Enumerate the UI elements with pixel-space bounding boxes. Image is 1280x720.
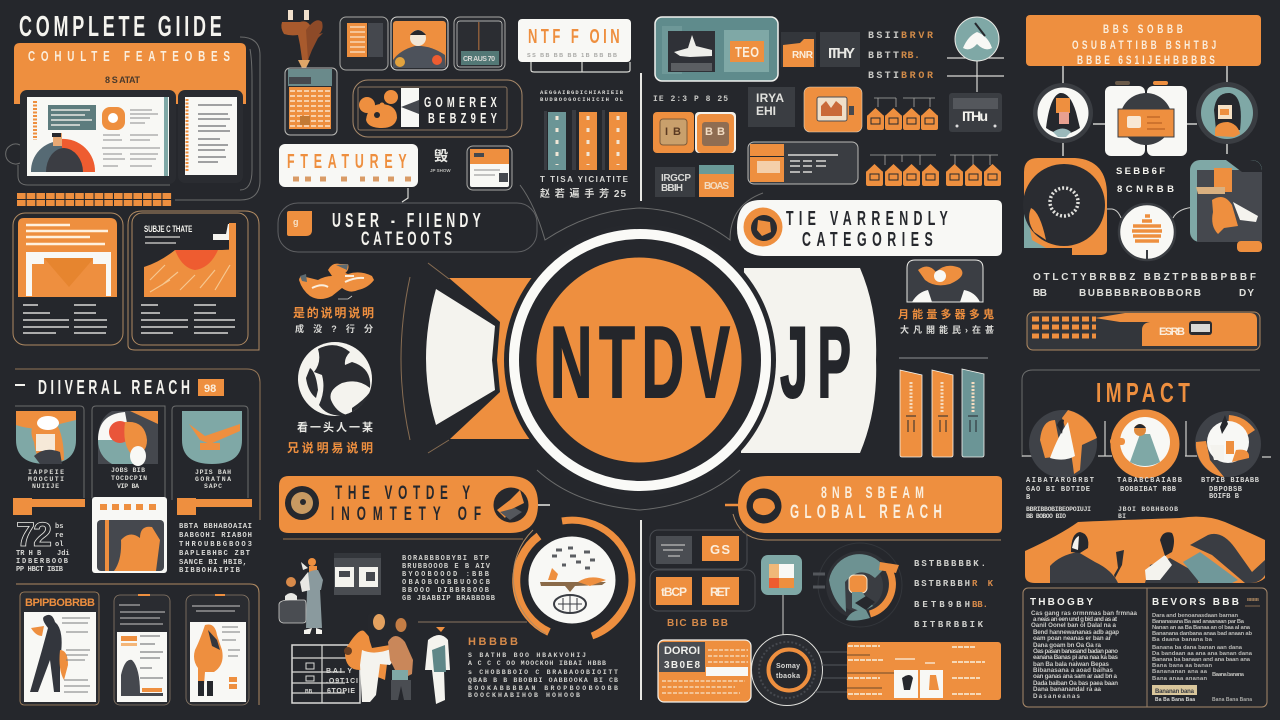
reach text block: SANCE BI HBIB,: [179, 559, 247, 567]
small caption: BUDBOOGOCIHICIH OL: [540, 96, 624, 103]
features card: [279, 144, 418, 202]
notes box: Bana Bana Bana: [1212, 697, 1252, 703]
circle portrait left: [1033, 83, 1093, 143]
impact captions: TABABCBAIABB: [1117, 477, 1183, 485]
panel: left of centre: [287, 264, 374, 455]
white categories pill: TIE VARRENDLY: [786, 207, 948, 230]
mini tile grid: GS: [710, 542, 730, 557]
impact captions: AIBATAROBRBT: [1026, 477, 1094, 485]
radial portrait: [813, 543, 902, 627]
mini device: [467, 146, 512, 190]
right paragraph: Banana ba dana banan aan dana: [1152, 645, 1243, 651]
notes box: THBOGBY: [1030, 597, 1093, 608]
table: [292, 645, 360, 703]
mini tile grid: RET: [710, 585, 731, 599]
notes box: [1023, 588, 1267, 707]
card two: TOCDCPIN: [111, 475, 147, 482]
text block: OBAOBOOBBUOOCB: [402, 579, 491, 587]
text lines: [1033, 272, 1256, 299]
reach text block: [179, 523, 252, 575]
dark and teal tiles: BOAS: [704, 181, 729, 192]
right paragraph: Banana ba banaan and ana baan ana: [1152, 657, 1251, 663]
table: BB: [305, 689, 313, 695]
device illustration: [907, 260, 983, 302]
left white wedge: [426, 289, 495, 425]
text rows: BSTBRBBH: [914, 579, 970, 589]
panel: complete guide: [6, 11, 260, 350]
orange picture tile: [804, 87, 862, 132]
banner heading: COHULTE FEATEOBES: [28, 48, 230, 65]
body text: QBAB B B BBOBBI OABBOOKA BI CB: [468, 677, 618, 684]
left paragraph: Dasaneanas: [1033, 693, 1081, 700]
right paragraph: Bananana danbana anaa bad anaan ab: [1152, 631, 1252, 637]
phone three: [186, 594, 249, 705]
outer dark disc: [504, 224, 776, 496]
card one: [15, 406, 84, 498]
small caption: [540, 89, 624, 103]
icon: orange illustration: [299, 264, 374, 299]
thumbnail two: [391, 17, 448, 70]
mini tile grid: tBCP: [661, 585, 687, 599]
middle caption: 8CNRBB: [1117, 184, 1174, 195]
bookmark caption: T TISA YICIATITE: [540, 175, 629, 184]
orange tiles: [653, 112, 736, 153]
big number: 72: [16, 516, 52, 554]
centre card: [1105, 81, 1187, 156]
text lines: DY: [1239, 288, 1254, 299]
phone one: [20, 592, 99, 705]
frame line: [15, 369, 260, 520]
reach text block: THROUBBGBOO3: [179, 541, 252, 549]
feature card right: [128, 211, 259, 350]
thumbnail three: [454, 17, 505, 70]
orange subheading: HBBBB: [468, 636, 518, 648]
vertical rules: [640, 73, 642, 700]
flow connector: [1107, 207, 1196, 218]
teal video panel: TEO: [735, 43, 759, 60]
text lines: BUBBBBRBOBBORB: [1079, 288, 1201, 299]
text rows: BSII: [868, 31, 899, 42]
left paragraph: eanana Banas pi ana naa ka bas: [1033, 654, 1119, 661]
big number: TR H B: [16, 550, 42, 558]
card two: VIP BA: [117, 483, 139, 490]
orange disc: [536, 258, 742, 462]
banner label: 8 S ATAT: [105, 75, 140, 85]
table: .O9T1CI: [326, 678, 358, 685]
text rows: RK: [972, 579, 994, 589]
outlined orange card: [658, 640, 751, 702]
icon: figure with raised hands: [281, 10, 326, 68]
side arcs: [401, 263, 449, 453]
dark tile: ITHY: [828, 45, 855, 62]
reach text block: BBTA BBHABOAIAI: [179, 523, 252, 531]
app icon: [761, 555, 802, 595]
panel: browse: [353, 80, 522, 137]
white categories pill: CATEGORIES: [802, 228, 933, 251]
machine: [334, 553, 381, 595]
left paragraph: Dana goam bn Oa Ga ra: [1033, 642, 1102, 649]
impact captions: BOBBIBAT RBB: [1120, 486, 1177, 494]
orange header box: BBBE 6S1IJEHBBBBS: [1077, 55, 1215, 67]
white globe caption: 看 一 头 人 一 某: [297, 420, 373, 434]
orbit circle: Somay: [776, 663, 800, 670]
orange caption: 月 能 量 多 器 多 鬼: [898, 307, 994, 321]
logo wordmark: NTDV: [550, 306, 730, 419]
card three: [172, 406, 248, 500]
central logo: [401, 73, 876, 700]
tablet with pie chart: [20, 90, 176, 184]
connectors: [1063, 66, 1227, 156]
white heading card: SS BB BB BB 1B BB BB: [527, 53, 617, 59]
text rows: BB.: [972, 600, 988, 610]
text block: [402, 555, 496, 603]
orange header box: BBS SOBBB: [1103, 24, 1183, 36]
dark tile: [820, 32, 860, 67]
orbit circle: tbaoka: [776, 673, 800, 680]
info panel: [748, 142, 858, 184]
text rows: RB.: [901, 51, 920, 62]
card one: IAPPEIE: [28, 469, 64, 476]
outlined orange card: DOROI: [664, 645, 700, 657]
small caption: IE 2:3 P 8 25: [653, 95, 728, 104]
left paragraph: Oas pasan banasand badan pano: [1033, 648, 1118, 655]
orange ribbon: [449, 278, 560, 439]
right paragraph: Bana bana aa banan: [1152, 663, 1212, 669]
orange feature banner: [14, 43, 246, 104]
white caption: 大 凡 開 能 民 › 在 甚: [900, 324, 994, 335]
card two: [92, 406, 165, 500]
panel: diverse reach: [13, 369, 260, 705]
panel: impact: [1022, 370, 1271, 707]
right white panel: [741, 268, 876, 453]
circle portrait right: [1196, 82, 1258, 144]
bookmark caption: [540, 175, 629, 200]
card three: JPIS BAH: [195, 469, 231, 476]
outlined orange card: 3B0E8: [664, 660, 700, 671]
impact captions: B: [1026, 494, 1031, 502]
notes box: BEVORS BBB: [1152, 597, 1239, 608]
right paragraph: Da bandaan aa ana ana banan dana: [1152, 651, 1253, 657]
dark orange tile: RNR: [792, 50, 814, 61]
text rows: BITBRBBIK: [914, 620, 984, 630]
left paragraph: Bend hannewananas adb agap: [1033, 629, 1119, 636]
orbit circle: [752, 634, 822, 706]
people group lower: [344, 611, 450, 704]
card three: GORATNA: [195, 476, 231, 483]
middle caption: [1116, 166, 1174, 195]
body text: BOOCKHABIHOB HOHOOB: [468, 692, 580, 699]
orange data panel: [847, 642, 1001, 700]
features card: FTEATUREY: [287, 150, 407, 173]
orange globe caption: 兄 说 明 易 说 明: [287, 440, 373, 455]
right paragraph: Bananasana Ba aad anaanaan par Ba: [1152, 619, 1245, 625]
text rows: BSTI: [868, 71, 899, 82]
panel: browse: BEBZ9EY: [428, 110, 497, 127]
mini tile grid: [650, 530, 755, 611]
phone one: BPIPBOBRBB: [25, 597, 95, 609]
impact circle three: [1195, 411, 1261, 477]
left paragraph: a neas an een und g bid and as at: [1033, 616, 1117, 623]
small caption: AEGGAIBGDICHIARIEIB: [540, 89, 624, 96]
text lines: BB: [1033, 288, 1047, 299]
small tablet: [178, 90, 243, 183]
card two: JOBS BIB: [111, 467, 145, 474]
feature card left: [13, 213, 123, 345]
text rows: BETB9BH: [914, 600, 970, 610]
big number: bs: [55, 523, 63, 531]
reach text block: BIBBOHAIPIB: [179, 567, 241, 575]
impact sub captions: BI: [1118, 513, 1126, 520]
panel: bottom middle right: [650, 476, 1002, 706]
heading dash: [15, 384, 25, 386]
text block: GB JBABBIP BRABBDBB: [402, 595, 496, 603]
user friendly panel: [278, 203, 537, 252]
notes box: BBBB: [1247, 597, 1260, 602]
impact captions: GAO BI BDTIDE: [1026, 486, 1090, 494]
dark info tile: [748, 87, 795, 127]
user friendly panel: g: [293, 217, 298, 227]
decorative outline arcs: [6, 37, 260, 200]
user friendly panel: USER - FIIENDY: [332, 209, 481, 232]
right paragraph: Nanan an aa Ba Banaa an ol baa al ana: [1152, 625, 1251, 631]
orange bars: [13, 498, 252, 515]
orange caption: BIC BB BB: [667, 618, 728, 629]
left paragraph: Bibanasana a aoad baihas: [1033, 667, 1114, 674]
picture right: [1190, 160, 1262, 252]
title: COMPLETE GIIDE: [19, 11, 222, 43]
white ring: [514, 234, 766, 486]
big badge left: [1023, 158, 1107, 255]
note tag: [1152, 685, 1197, 695]
body text: [468, 652, 618, 699]
impact captions: BTPIB BIBABB: [1201, 477, 1260, 485]
circle: stacked item: [1119, 204, 1175, 260]
heading badge: [198, 379, 224, 396]
big number: IDBERBOOB: [16, 558, 69, 566]
dark and teal tiles: [655, 165, 734, 197]
thumbnail one: [340, 17, 388, 70]
text rows: BBTT: [868, 51, 899, 62]
logo suffix: JP: [780, 306, 851, 419]
impact circle two: [1110, 410, 1180, 478]
global reach pill: [725, 476, 1002, 540]
table: 6TOPIE: [327, 688, 355, 695]
people group upper: [279, 558, 323, 634]
big number: re: [55, 532, 63, 540]
hanging tags row two: [866, 155, 939, 186]
phone two: [114, 594, 170, 705]
bottom widget: [1027, 312, 1260, 350]
panel: top middle right: [653, 17, 1004, 256]
white categories pill: [737, 200, 1002, 256]
left paragraph: Dada baiban Oa bas paea baan: [1033, 680, 1118, 687]
text rows: [914, 559, 994, 630]
heading: DIIVERAL REACH: [38, 376, 190, 399]
right paragraph: Ba daana banana ba: [1152, 637, 1213, 643]
dark sign: ITHu: [962, 108, 988, 124]
dark info tile: EHI: [756, 104, 776, 118]
big number: Jdi: [57, 550, 70, 558]
text block: BORABBBOBYBI BTP: [402, 555, 489, 563]
icon: globe: [298, 342, 372, 416]
body text: S BATHB BOO HBAKVOHIJ: [468, 652, 586, 659]
book spines: [900, 369, 984, 457]
impact sub captions: [1026, 506, 1178, 520]
rule: [283, 538, 523, 540]
bookmark caption: 赵 若 遍 手 芳 25: [540, 187, 626, 200]
dark orange tile: [781, 32, 816, 67]
orange pill heading: [279, 476, 550, 533]
connector arcs: [520, 185, 763, 510]
rule: [418, 621, 527, 623]
notes box: Ba Ba Bana Baa: [1155, 697, 1195, 703]
orange tiles: BB: [705, 126, 725, 138]
impact sub captions: BB BOBOO BIO: [1026, 513, 1066, 520]
orange pill heading: INOMTETY OF: [331, 504, 481, 525]
text lines: OTLCTYBRBBZ BBZTPBBBPBBF: [1033, 272, 1256, 283]
big number: ol: [55, 541, 63, 549]
tile rows: [17, 196, 172, 203]
dark info tile: IRYA: [756, 91, 784, 105]
teal video panel: [655, 17, 778, 81]
notes box: Bananan bana: [1155, 689, 1195, 695]
table: BAI Y: [326, 668, 352, 675]
connector lines: [815, 652, 847, 692]
impact sub captions: BBRIBBOBIBEOPOIUJI: [1026, 506, 1091, 513]
right paragraph: Baana banana: [1212, 672, 1245, 678]
panel: bottom middle left: [279, 476, 632, 704]
bottom widget: ESRB: [1159, 326, 1185, 338]
icon: small emblem: [430, 148, 451, 173]
tablet with list: [285, 68, 337, 135]
middle caption: SEBB6F: [1116, 166, 1165, 177]
world balance medallion: [513, 519, 632, 636]
orange header box: [1026, 15, 1261, 67]
body text: BOOKABBBBAN BROPBOOBOOBB: [468, 685, 618, 692]
divider: [899, 357, 988, 359]
impact circle one: [1029, 410, 1097, 478]
left paragraph: Cas gang ras ormnmas ban frmnaa: [1031, 610, 1138, 617]
orange caption: 是 的 说 明 说 明: [293, 305, 374, 320]
big number: PP HBCT IBIB: [16, 566, 64, 574]
white caption: 成 没 ? 行 分: [295, 323, 373, 334]
right paragraph: Dara and benoanasdaan barnan: [1152, 613, 1238, 619]
user friendly panel: CATEOOTS: [361, 229, 452, 250]
feature card right: SUBJE C THATE: [144, 224, 192, 234]
text block: BYOOBOOOD :BBB: [402, 571, 490, 579]
text rows: [868, 31, 933, 82]
card one: MOOCUTI: [28, 476, 64, 483]
dark sign: [949, 93, 1002, 132]
connector: [782, 595, 784, 636]
card one: NUIIJE: [32, 483, 59, 490]
white heading card: [518, 19, 631, 72]
panel: top middle left: [278, 10, 631, 252]
panel: right of centre: [898, 260, 994, 457]
hanging tags row one: [867, 98, 938, 130]
impact captions: BOIFB B: [1209, 493, 1240, 501]
heading badge: 98: [204, 383, 216, 395]
orange header box: OSUBATTIBB BSHTBJ: [1072, 40, 1216, 52]
body text: A C C C OO MOOCKOH IBBAI HBBB: [468, 660, 606, 667]
impact rails: [1022, 421, 1271, 457]
text rows: BSTBBBBBK.: [914, 559, 986, 569]
left paragraph: ban Ba bala naiwan Bepas: [1033, 661, 1110, 668]
left paragraph: Dana bananandal ra aa: [1033, 686, 1102, 693]
left paragraph: Oanil Oonel ban ol Dalal na a: [1031, 622, 1117, 629]
global reach pill: 8NB SBEAM: [821, 482, 924, 502]
panel: right column top: [1023, 15, 1262, 350]
text rows: BROR: [901, 71, 933, 82]
impact captions: DBPOBSB: [1209, 486, 1243, 494]
white media card: [92, 497, 167, 573]
reach text block: BABGOHI RIABOH: [179, 532, 252, 540]
icon: small emblem: JP SHOW: [430, 168, 451, 173]
big number: [16, 516, 70, 574]
text block: BBOOO DIBBRBOOB: [402, 587, 490, 595]
heading: IMPACT: [1096, 377, 1190, 409]
text rows: BRVR: [901, 31, 933, 42]
icon: globe with ladder: [947, 17, 1004, 92]
text block: BRUBBOOOB E B AIV: [402, 563, 491, 571]
white heading card: NTF F OIN: [528, 25, 620, 48]
left paragraph: oam poan neanas er ban ar: [1033, 635, 1112, 642]
icon: small emblem: 毁: [434, 148, 448, 164]
dark and teal tiles: BBIH: [661, 183, 683, 194]
hanging tags row three: [946, 155, 1001, 186]
frame line lower: [16, 584, 259, 705]
panel: browse: GOMEREX: [424, 94, 497, 111]
right paragraph: [1152, 613, 1253, 682]
card three: SAPC: [204, 483, 222, 490]
global reach pill: GLOBAL REACH: [790, 502, 942, 523]
thumbnail three: CR AUS 70: [463, 56, 495, 63]
bookmark bars: [544, 110, 627, 170]
left paragraph: [1031, 610, 1138, 700]
impact sub captions: JBOI BOBHBOOB: [1118, 506, 1178, 513]
right paragraph: Bana anaa ananan: [1152, 676, 1207, 682]
dark and teal tiles: IRGCP: [661, 173, 691, 184]
left paragraph: oan ganas ana sam ar aad bn a: [1033, 673, 1118, 680]
right paragraph: Banananan ana aa: [1152, 669, 1208, 675]
frame line: [1022, 370, 1260, 457]
impact captions: [1026, 477, 1260, 502]
reach text block: BAPLEBHBC ZBT: [179, 550, 251, 558]
landscape with people: [1025, 517, 1265, 583]
orange tiles: IB: [665, 126, 681, 138]
orange pill heading: THE VOTDE Y: [335, 483, 470, 504]
body text: s CHOBBBOIO C BRABAOOBIOITT: [468, 669, 618, 676]
